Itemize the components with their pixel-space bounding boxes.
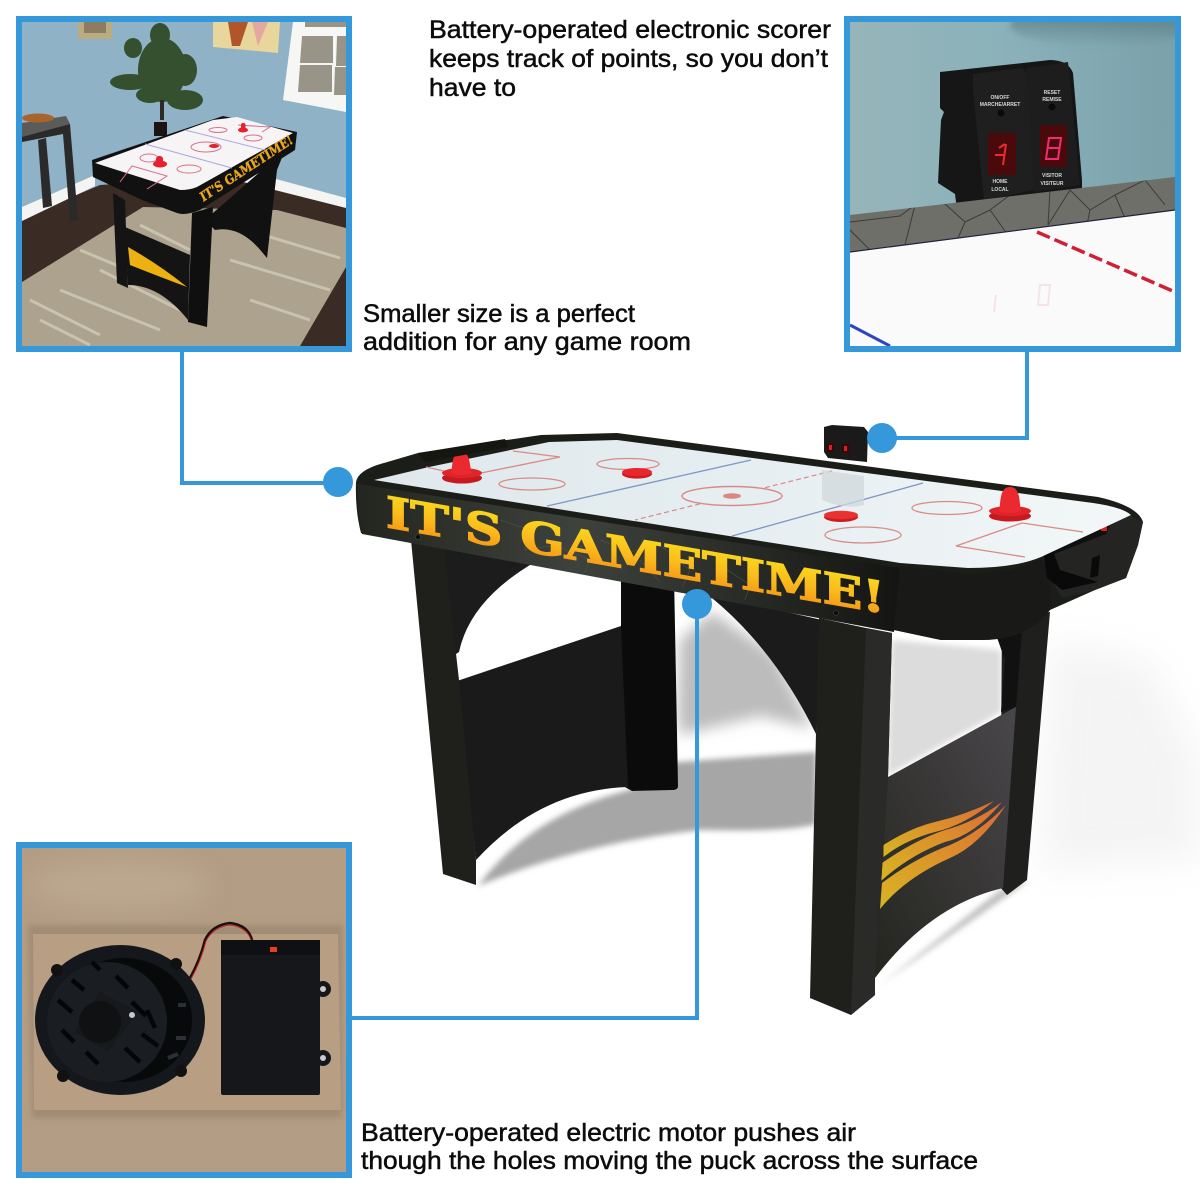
score digit 1: [988, 133, 1016, 175]
scorer labels: [980, 90, 1064, 193]
picture frame: [78, 22, 112, 39]
frame: [847, 19, 1178, 349]
faceoff circles: [499, 458, 982, 543]
button right: [1048, 104, 1056, 110]
frame: [19, 19, 349, 349]
caption: electronic scorer: [429, 16, 831, 102]
puck left: [622, 468, 652, 479]
mottled background patch: [56, 872, 184, 898]
wire: [190, 923, 252, 978]
connector: motor panel to table: [352, 589, 712, 1018]
blue line: [850, 325, 890, 346]
table rim: [356, 433, 1143, 640]
white surface: [1010, 210, 1175, 232]
motor housing: [74, 992, 138, 1052]
mini slogan: IT'S GAMETIME!: [198, 133, 296, 206]
rug: [22, 207, 346, 346]
mini back leg and arch: [212, 158, 282, 258]
flame graphic: [880, 801, 1006, 909]
mini tabletop rim: [92, 116, 297, 214]
digit reflections: [994, 285, 1050, 312]
back-right leg: [1000, 612, 1050, 895]
mini mallets: [153, 123, 248, 168]
gametime slogan: IT'S GAMETIME!: [386, 487, 885, 624]
mini flames: [128, 247, 187, 287]
right upper arch block: [995, 630, 1022, 712]
tabs: [315, 981, 331, 1066]
caption: electronic scorer: have to: [429, 74, 516, 102]
mini front leg: [188, 207, 213, 327]
center line: [635, 471, 832, 520]
textured rail: [850, 177, 1175, 252]
goal slot: [1043, 548, 1100, 590]
scorer housing: [938, 60, 1082, 210]
caption: electronic scorer: Battery-operated electronic scorer: [429, 16, 831, 44]
caption: electric motor: [361, 1119, 978, 1175]
score digit 0: [1040, 125, 1067, 167]
center spot: [723, 493, 741, 499]
caption: electronic scorer: keeps track of points, so you don’t: [429, 45, 828, 73]
mallet left: [442, 452, 482, 484]
panel: room scene photo: [19, 19, 349, 349]
dark shadow at top of wall: [1009, 22, 1175, 41]
fan slots: [58, 962, 158, 1064]
reflection of scorer: [822, 470, 864, 507]
playing surface: [374, 440, 1131, 568]
connector: scorer panel to table: [867, 352, 1027, 453]
caption: electric motor: Battery-operated electric motor pushes air: [361, 1119, 856, 1147]
leg side face: [851, 628, 892, 1015]
blue lines: [547, 460, 923, 536]
scorer labels: MARCHE/ARRET: [980, 102, 1020, 108]
right handle end: [1041, 514, 1143, 598]
wall art: [213, 22, 280, 53]
red dashed line: [1037, 232, 1175, 292]
back-left leg: [621, 575, 678, 791]
left front leg: [411, 540, 476, 885]
scorer labels: REMISE: [1042, 97, 1062, 103]
rug stripes: [30, 225, 340, 345]
band texture: [500, 520, 750, 600]
right curved corner: [894, 558, 1052, 640]
red button: [1101, 526, 1107, 531]
connector dot left: [323, 467, 353, 497]
center circle: [682, 486, 782, 506]
caption: smaller size: Smaller size is a perfect: [363, 300, 635, 328]
side table: [22, 114, 78, 221]
mini left leg: [113, 193, 128, 288]
goal rail bar: [1041, 526, 1110, 556]
mini panel: [125, 227, 190, 320]
button left: [998, 110, 1004, 116]
panel: electronic scorer closeup: [847, 3, 1190, 349]
plant: [110, 23, 203, 120]
frame: [19, 845, 349, 1175]
connector: size panel to table: [182, 352, 353, 497]
connector dot band: [682, 589, 712, 619]
goal boxes: [426, 451, 1083, 557]
rail edge line: [850, 210, 1175, 252]
motor cap: [79, 1001, 121, 1043]
outer ring slots: [168, 1005, 186, 1058]
mallet right: [989, 487, 1031, 522]
side band: [358, 484, 900, 632]
caption: smaller size: [363, 300, 691, 356]
mini surface: [95, 117, 293, 190]
main product: air hockey table: [356, 425, 1200, 1015]
rail scoreboard bar: [418, 439, 508, 462]
board: [33, 934, 341, 1110]
scorer labels: ON/OFF: [991, 95, 1009, 101]
small electronic scorer: [824, 425, 868, 462]
puck right: [824, 511, 858, 522]
screws: [416, 534, 840, 616]
scorer labels: HOME: [992, 179, 1008, 185]
red switch: [270, 947, 277, 952]
right inner arch: [712, 595, 822, 734]
scorer labels: RESET: [1044, 90, 1060, 96]
caption: smaller size: addition for any game room: [363, 328, 691, 356]
connector dot scorer: [867, 423, 897, 453]
window: [283, 22, 346, 112]
right end panel: [875, 707, 1016, 978]
screws: [51, 958, 187, 1082]
scorer labels: VISITOR: [1042, 173, 1062, 179]
mini table: [92, 116, 297, 327]
board shadow: [28, 925, 343, 1118]
caption: electric motor: though the holes moving the puck across the surface: [361, 1147, 978, 1175]
panel: motor and battery photo: [19, 845, 349, 1175]
battery box: [221, 940, 331, 1095]
scorer on mini table: [154, 122, 167, 136]
red wire: [191, 925, 251, 979]
right front leg: [810, 618, 892, 1015]
floor shadows: [478, 612, 1200, 985]
scorer labels: VISITEUR: [1040, 181, 1064, 187]
upper left arch: [440, 540, 535, 660]
mini markings: [120, 125, 270, 189]
scorer labels: LOCAL: [991, 187, 1009, 193]
wood floor: [22, 175, 346, 346]
baseboard: [22, 170, 346, 221]
left end panel: [457, 626, 628, 860]
fan: [35, 945, 205, 1095]
